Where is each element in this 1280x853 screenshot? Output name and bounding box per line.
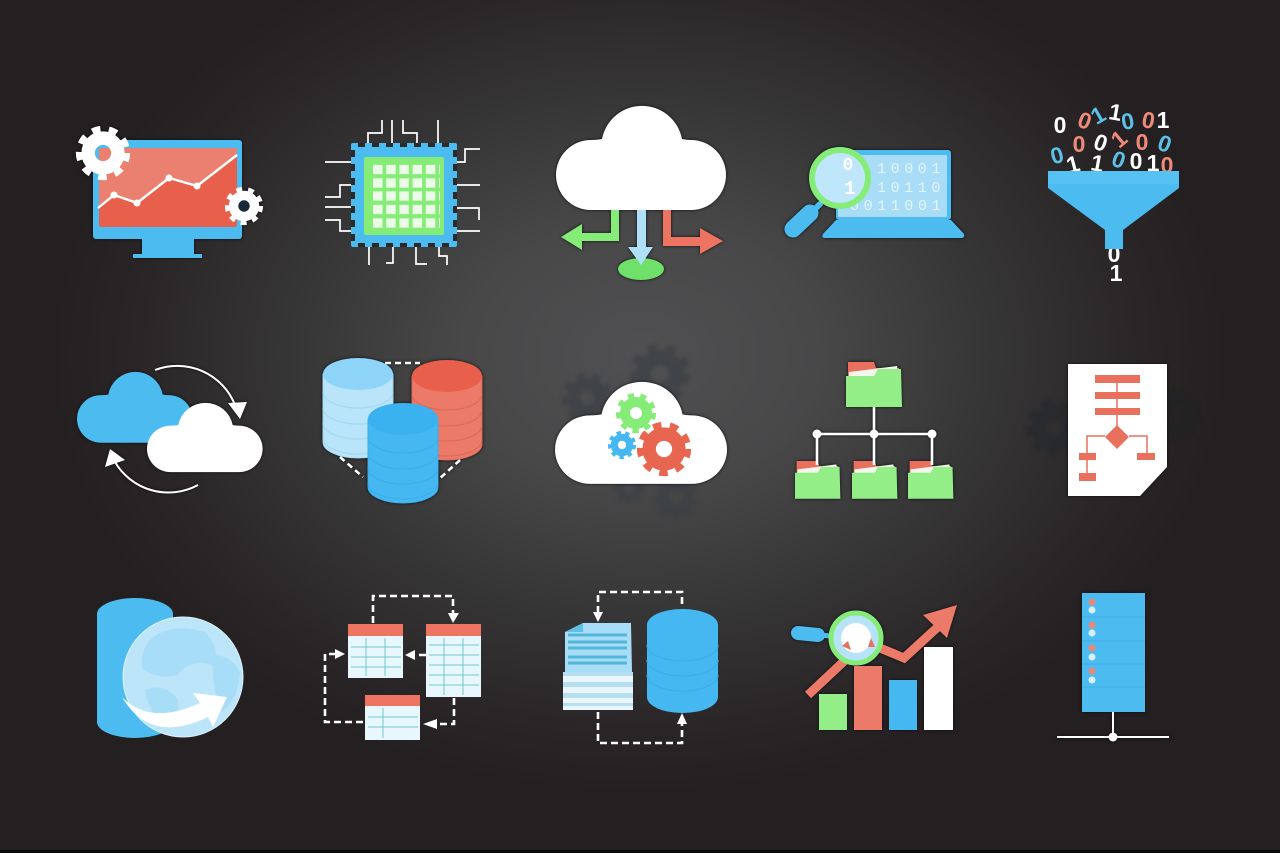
funnel digits: 0 xyxy=(1047,141,1066,169)
magnifier lens: 0 xyxy=(843,156,853,176)
chip traces xyxy=(325,120,480,265)
top sync arrow xyxy=(155,366,247,419)
icon: three databases xyxy=(323,358,482,503)
red arrow xyxy=(663,210,723,254)
arrowheads xyxy=(593,612,687,724)
funnel digits: 1 xyxy=(1106,125,1132,153)
blue database xyxy=(368,403,438,503)
magnifier lens xyxy=(812,150,868,206)
laptop screen xyxy=(836,150,951,220)
red gear xyxy=(640,425,688,473)
red database xyxy=(412,360,482,460)
icon: processor chip xyxy=(325,120,480,265)
funnel digits: 0 xyxy=(1154,129,1175,158)
chart line xyxy=(98,155,237,208)
chip notches xyxy=(353,145,455,245)
funnel digits: 1 xyxy=(1089,149,1106,177)
icon: cloud with gears xyxy=(555,382,727,484)
funnel digits: 0 xyxy=(1108,241,1120,267)
trend arrow xyxy=(808,605,957,695)
icon: bar chart with trend arrow xyxy=(798,605,957,730)
chip body xyxy=(351,143,457,247)
middle folder xyxy=(852,461,897,499)
icon: server rack xyxy=(1057,593,1169,742)
icon: document and database exchange xyxy=(563,592,718,743)
magnifier lens: 1 xyxy=(844,178,856,200)
flowchart boxes xyxy=(1079,375,1155,481)
chip cells xyxy=(373,170,440,223)
icon: syncing clouds xyxy=(77,366,263,493)
table three xyxy=(365,695,420,740)
binary text: 0011001 xyxy=(850,198,945,215)
monitor frame xyxy=(93,140,242,239)
blue arrow xyxy=(628,210,653,265)
swoosh arrow xyxy=(122,693,227,727)
small gear xyxy=(227,189,261,223)
funnel digits: 0 xyxy=(1073,131,1085,157)
funnel lid shade xyxy=(1048,171,1179,184)
funnel digits: 0 xyxy=(1140,106,1157,134)
cloud xyxy=(555,382,727,484)
paper xyxy=(1068,364,1167,496)
page fold xyxy=(565,623,583,632)
funnel digits: 1 xyxy=(1147,150,1160,176)
database cylinder xyxy=(97,598,173,738)
arrowheads xyxy=(335,613,459,729)
right folder xyxy=(908,461,953,499)
globe continents xyxy=(142,628,240,726)
dashed links xyxy=(340,363,460,480)
laptop base xyxy=(822,220,964,238)
base ellipse xyxy=(618,258,664,280)
funnel digits: 1 xyxy=(1157,107,1170,133)
funnel digits: 0 xyxy=(1136,129,1148,155)
left folder xyxy=(795,461,840,499)
bottom edge line xyxy=(0,851,1280,852)
funnel digits xyxy=(1047,98,1175,286)
magnifier handle xyxy=(793,204,820,229)
icon: laptop with magnifier xyxy=(793,150,964,238)
binary text xyxy=(850,161,945,215)
bars xyxy=(819,647,953,730)
green arrow xyxy=(561,210,619,250)
table two xyxy=(426,624,481,697)
bottom sync arrow xyxy=(105,449,198,493)
icon: folder hierarchy xyxy=(795,362,953,499)
icon: linked tables xyxy=(325,596,481,740)
chart upper shade xyxy=(99,148,237,208)
paper stack xyxy=(563,672,633,710)
funnel digits: 1 xyxy=(1086,101,1110,130)
globe xyxy=(123,617,243,737)
page lines xyxy=(568,635,627,663)
funnel digits: 0 xyxy=(1108,145,1129,174)
status lights xyxy=(1088,598,1096,684)
monitor stand xyxy=(133,239,202,258)
light blue database xyxy=(323,358,393,458)
magnifier lens xyxy=(831,613,881,663)
large gear xyxy=(79,129,127,177)
white cloud xyxy=(147,403,263,472)
icon: database with globe xyxy=(97,598,243,738)
funnel digits: 0 xyxy=(1090,128,1111,157)
icon: flowchart document xyxy=(1068,364,1167,496)
cloud xyxy=(556,106,726,210)
funnel digits: 0 xyxy=(1074,106,1095,135)
connector lines xyxy=(812,407,936,465)
binary text: 10110 xyxy=(877,180,945,197)
dashed connectors xyxy=(325,596,454,724)
funnel digits: 1 xyxy=(1063,150,1083,178)
server body xyxy=(1082,593,1145,712)
icon: monitor with chart and gears xyxy=(79,129,261,258)
faint background gears xyxy=(565,348,1197,517)
green gear xyxy=(618,395,654,431)
network line xyxy=(1057,712,1169,742)
icon: cloud with flow arrows xyxy=(556,106,726,280)
blue gear xyxy=(610,433,634,457)
dashed connectors xyxy=(598,592,682,743)
chart area xyxy=(99,148,237,227)
blue cloud xyxy=(77,372,193,443)
database cylinder xyxy=(647,609,718,713)
server dividers xyxy=(1082,617,1145,687)
flowchart connectors xyxy=(1087,378,1147,477)
binary text: 10001 xyxy=(877,161,945,178)
funnel digits: 1 xyxy=(1110,260,1123,286)
front page xyxy=(565,623,632,672)
funnel digits: 0 xyxy=(1054,112,1066,138)
funnel digits: 1 xyxy=(1107,98,1124,126)
magnifier handle xyxy=(798,633,832,636)
funnel body xyxy=(1048,171,1179,249)
icon: data funnel xyxy=(1047,98,1179,286)
chip core xyxy=(364,157,444,235)
funnel digits: 0 xyxy=(1119,107,1136,135)
funnel digits: 0 xyxy=(1130,148,1142,174)
top folder xyxy=(846,362,902,407)
funnel digits: 0 xyxy=(1161,152,1173,178)
screen panel xyxy=(838,155,947,217)
table one xyxy=(348,624,403,678)
